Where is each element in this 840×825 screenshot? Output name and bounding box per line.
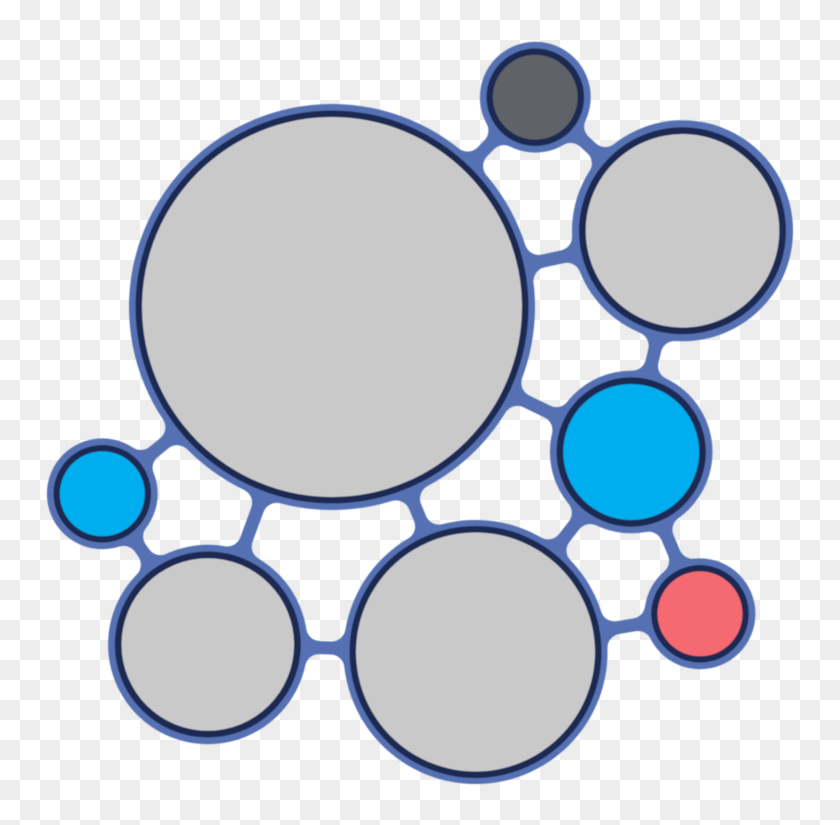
connector: large circle to lower centre circle [392, 486, 444, 539]
connector: left blue circle to lower left circle [118, 526, 167, 575]
connector: dark circle to upper right circle [562, 119, 614, 171]
connector: upper right circle to right blue circle [631, 333, 676, 379]
circle: small left blue [47, 438, 158, 549]
circle: large grey [129, 104, 535, 510]
circle: lower left grey [108, 545, 308, 744]
circle: small dark grey, top [480, 42, 591, 153]
circle: right blue [550, 371, 712, 533]
circle: upper right grey [572, 120, 793, 341]
connector: large circle to upper right circle [525, 235, 580, 283]
connector: lower centre circle to red circle [601, 604, 651, 649]
connector: right blue circle to red circle [646, 518, 696, 572]
connector: large circle to right blue circle [505, 378, 568, 435]
connector: lower left circle to lower centre circle [305, 628, 345, 667]
connector: large circle to left blue circle [131, 419, 188, 476]
connector: large circle to dark circle [459, 121, 513, 176]
connector: right blue circle to lower centre circle [541, 503, 597, 561]
connector: large circle to lower left circle [223, 490, 281, 559]
connectors between circles [118, 119, 696, 667]
circle: small red [645, 558, 755, 669]
circle: lower centre grey [344, 520, 608, 784]
